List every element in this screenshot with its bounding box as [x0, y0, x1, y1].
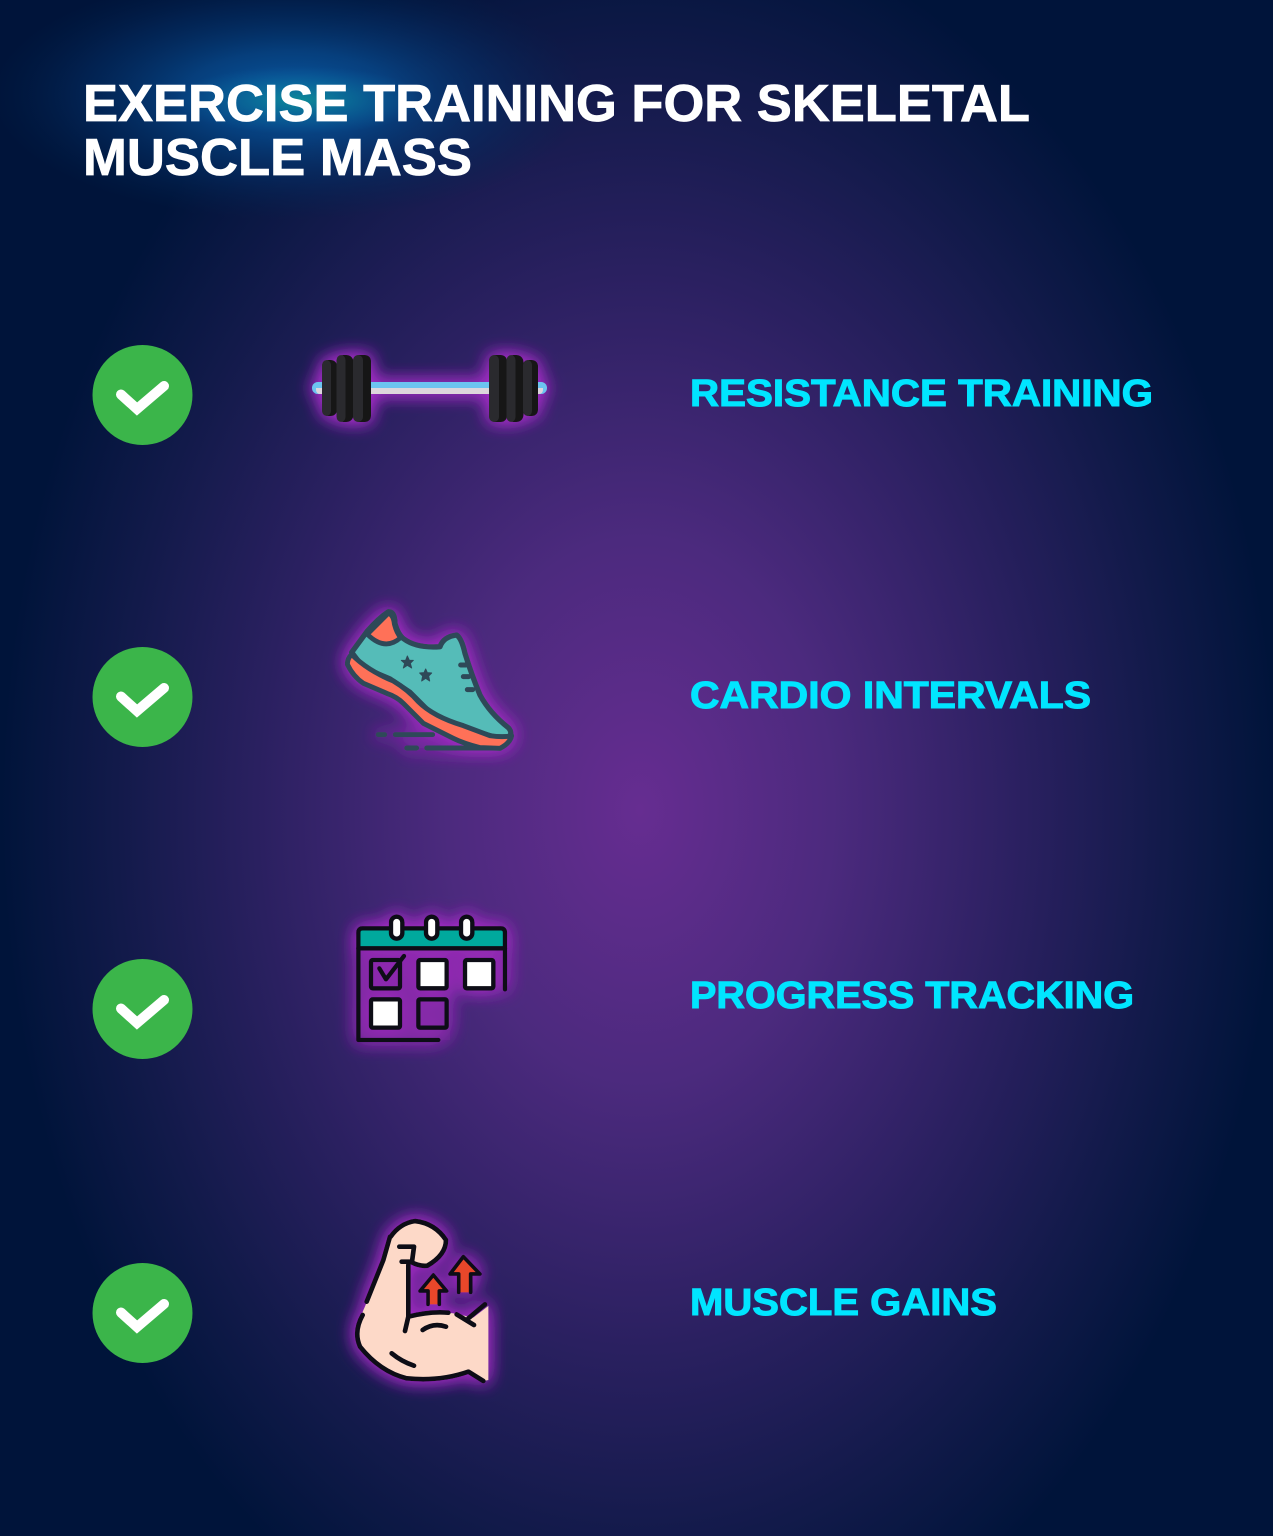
icon: calendar — [358, 917, 505, 1040]
icon: running shoe — [347, 612, 512, 748]
check badge: progress tracking — [92, 959, 192, 1059]
label: resistance training: RESISTANCE TRAINING — [690, 373, 1153, 415]
label: cardio intervals: CARDIO INTERVALS — [690, 675, 1091, 717]
check badge: resistance training — [92, 345, 192, 445]
label: muscle gains: MUSCLE GAINS — [690, 1282, 997, 1324]
label: progress tracking: PROGRESS TRACKING — [690, 975, 1134, 1017]
icon: barbell — [312, 355, 547, 422]
check badge: cardio intervals — [92, 647, 192, 747]
title: MUSCLE MASS — [83, 129, 472, 187]
title: EXERCISE TRAINING FOR SKELETAL — [83, 75, 1030, 133]
icon: flexed arm — [357, 1221, 488, 1381]
check badge: muscle gains — [92, 1263, 192, 1363]
title — [83, 75, 1030, 187]
